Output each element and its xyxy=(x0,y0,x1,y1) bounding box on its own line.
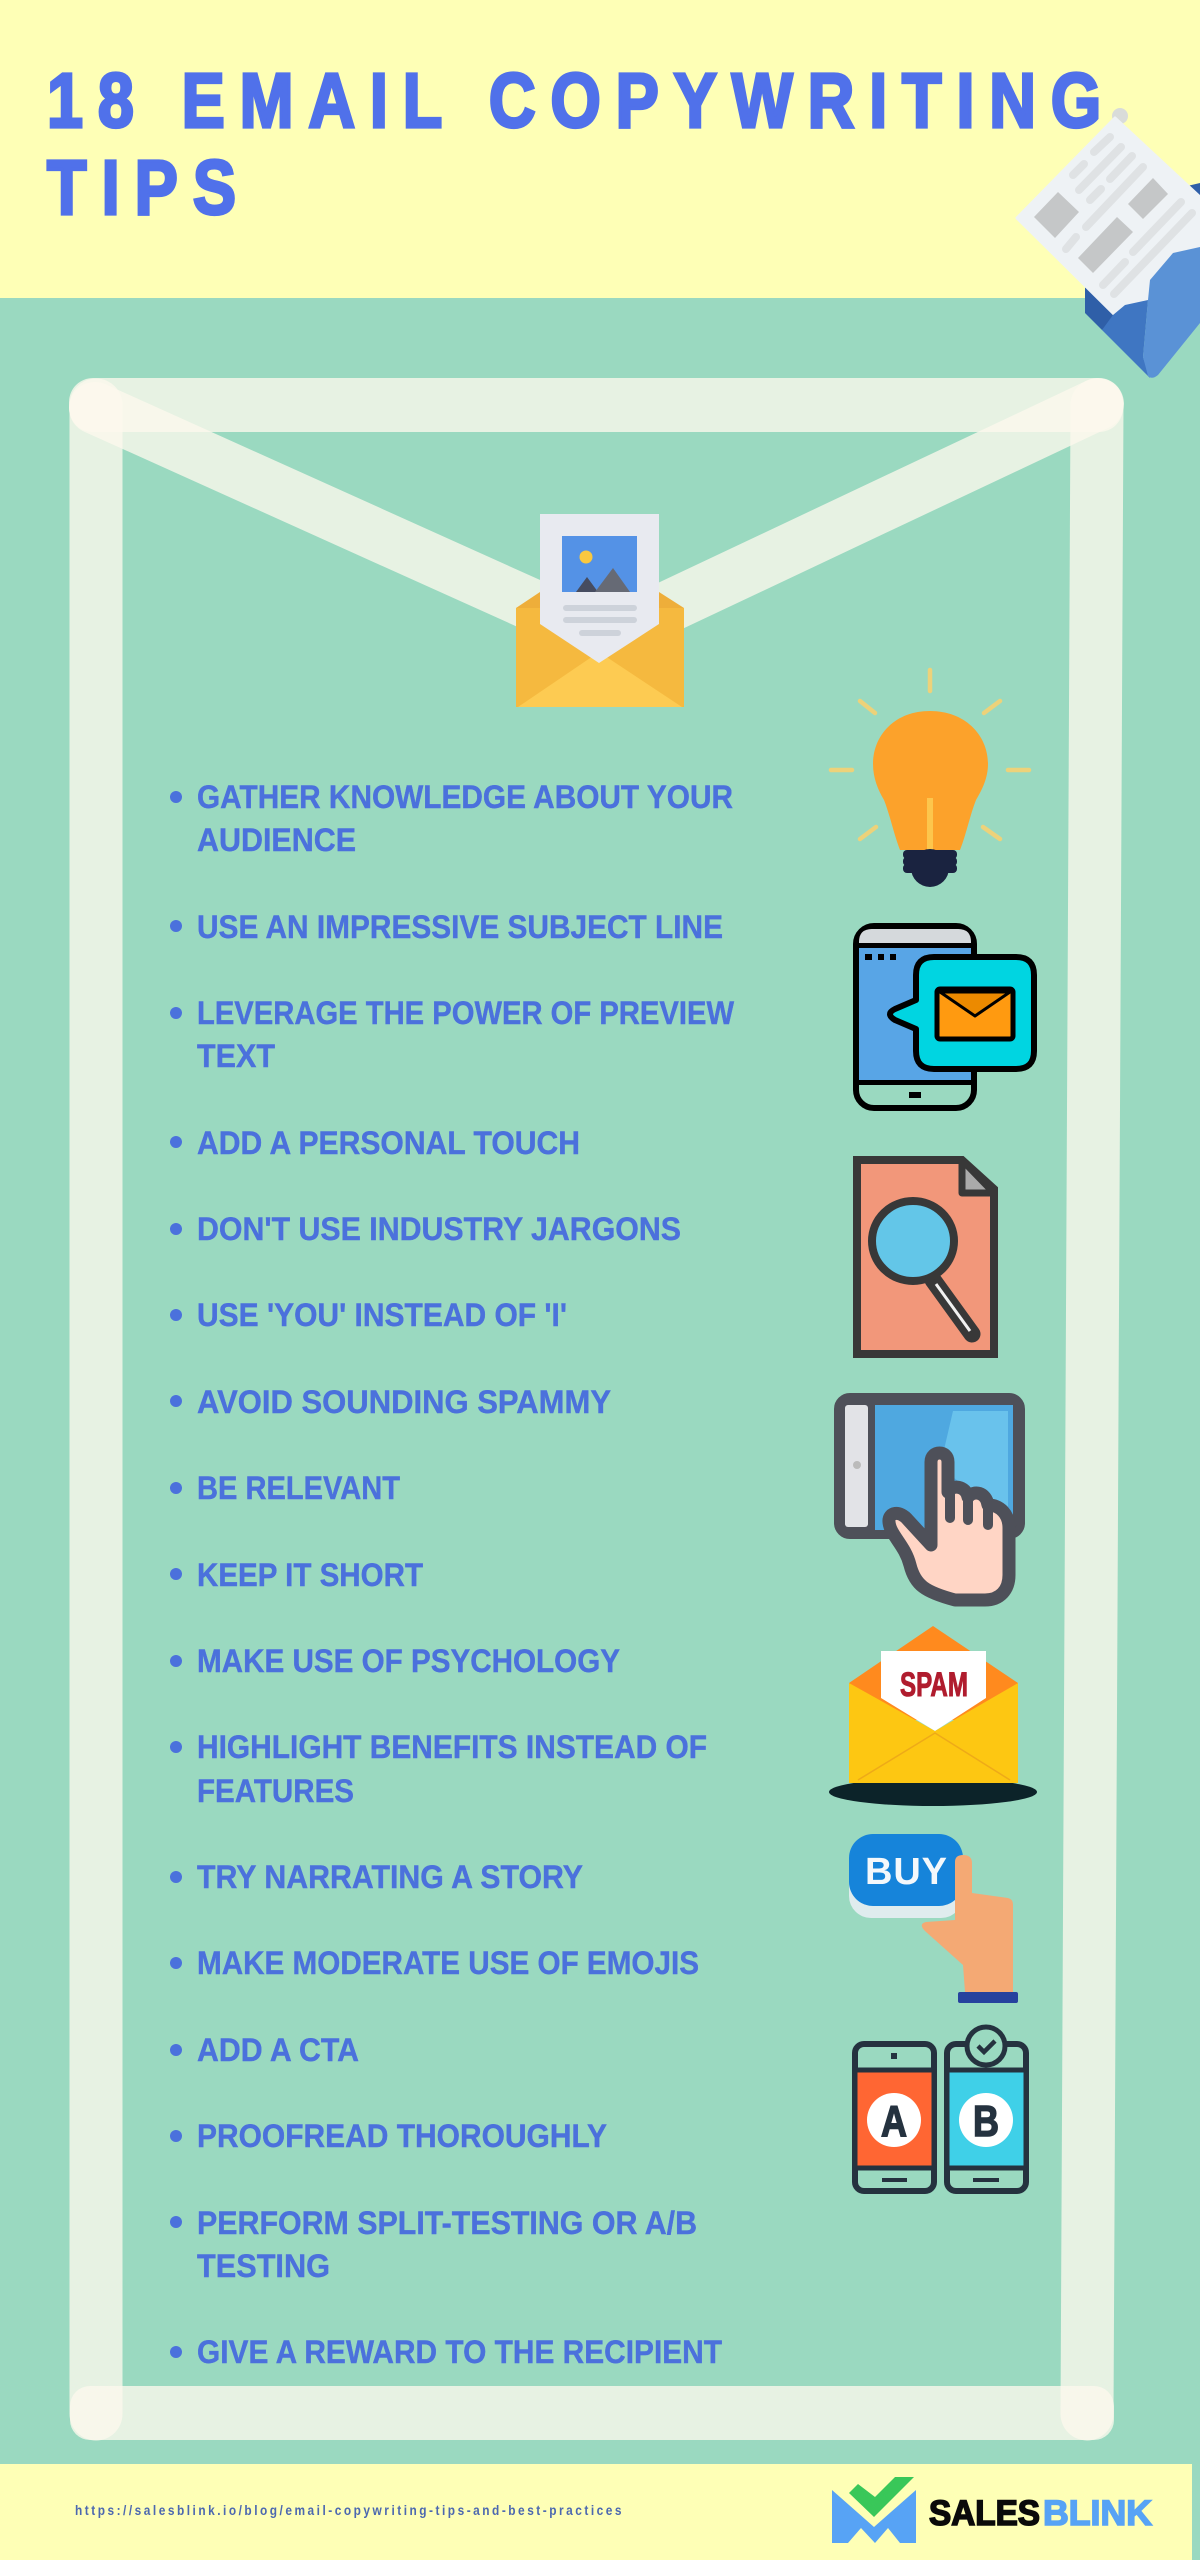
icon: light bulb xyxy=(831,670,1029,887)
icon: tablet with pointing hand xyxy=(838,1397,1021,1600)
logo: SalesBlink: SALES xyxy=(929,2494,1040,2533)
envelope outline frame xyxy=(69,378,1123,2440)
tip 15: PROOFREAD THOROUGHLY xyxy=(197,2118,607,2154)
tip 1: AUDIENCE xyxy=(197,822,356,858)
icon: document with magnifying glass xyxy=(857,1160,994,1354)
title: 18 EMAIL COPYWRITING xyxy=(47,59,1101,144)
tip 3: LEVERAGE THE POWER OF PREVIEW xyxy=(197,995,735,1031)
tip 14: ADD A CTA xyxy=(197,2032,359,2068)
tip 16: PERFORM SPLIT-TESTING OR A/B xyxy=(197,2205,697,2241)
icon: spam envelope xyxy=(829,1626,1037,1806)
tip 17: GIVE A REWARD TO THE RECIPIENT xyxy=(197,2334,722,2370)
tip 7: AVOID SOUNDING SPAMMY xyxy=(197,1384,611,1420)
tip 2: USE AN IMPRESSIVE SUBJECT LINE xyxy=(197,909,723,945)
tip 9: KEEP IT SHORT xyxy=(197,1557,423,1593)
logo: SalesBlink xyxy=(832,2477,1152,2543)
tip 13: MAKE MODERATE USE OF EMOJIS xyxy=(197,1945,699,1981)
tip 12: TRY NARRATING A STORY xyxy=(197,1859,583,1895)
tip 3 xyxy=(170,995,735,1074)
icon: spam envelope: SPAM xyxy=(900,1666,968,1704)
icon: blue envelope with newsletter page xyxy=(1017,108,1200,378)
footer link: https://salesblink.io/blog/email-copywriting-tips-and-best-practices xyxy=(75,2502,622,2518)
icon: A/B testing phones: B xyxy=(973,2097,999,2146)
tip 16 xyxy=(170,2205,697,2284)
icon: buy button with hand: BUY xyxy=(865,1851,947,1893)
tip 6: USE 'YOU' INSTEAD OF 'I' xyxy=(197,1297,567,1333)
tip 8: BE RELEVANT xyxy=(197,1470,400,1506)
title: TIPS xyxy=(47,146,236,231)
icon: A/B testing phones xyxy=(855,2027,1026,2191)
tip 11 xyxy=(170,1729,707,1809)
icon: buy button with hand xyxy=(849,1834,1018,2003)
logo: SalesBlink: BLINK xyxy=(1043,2494,1152,2533)
tip 1 xyxy=(170,779,733,858)
tip 11: FEATURES xyxy=(197,1773,354,1809)
header band xyxy=(0,0,1200,298)
tip 3: TEXT xyxy=(197,1038,275,1074)
footer band xyxy=(0,2464,1192,2560)
icon: phone with email message bubble xyxy=(856,926,1034,1108)
title xyxy=(47,59,1101,231)
tip 5: DON'T USE INDUSTRY JARGONS xyxy=(197,1211,681,1247)
tip 1: GATHER KNOWLEDGE ABOUT YOUR xyxy=(197,779,733,815)
tip 16: TESTING xyxy=(197,2248,330,2284)
icon: open yellow envelope with letter xyxy=(516,514,684,707)
tip 11: HIGHLIGHT BENEFITS INSTEAD OF xyxy=(197,1729,707,1765)
icon: A/B testing phones: A xyxy=(881,2097,907,2146)
tips list xyxy=(170,779,735,2370)
tip 4: ADD A PERSONAL TOUCH xyxy=(197,1125,580,1161)
tip 10: MAKE USE OF PSYCHOLOGY xyxy=(197,1643,620,1679)
